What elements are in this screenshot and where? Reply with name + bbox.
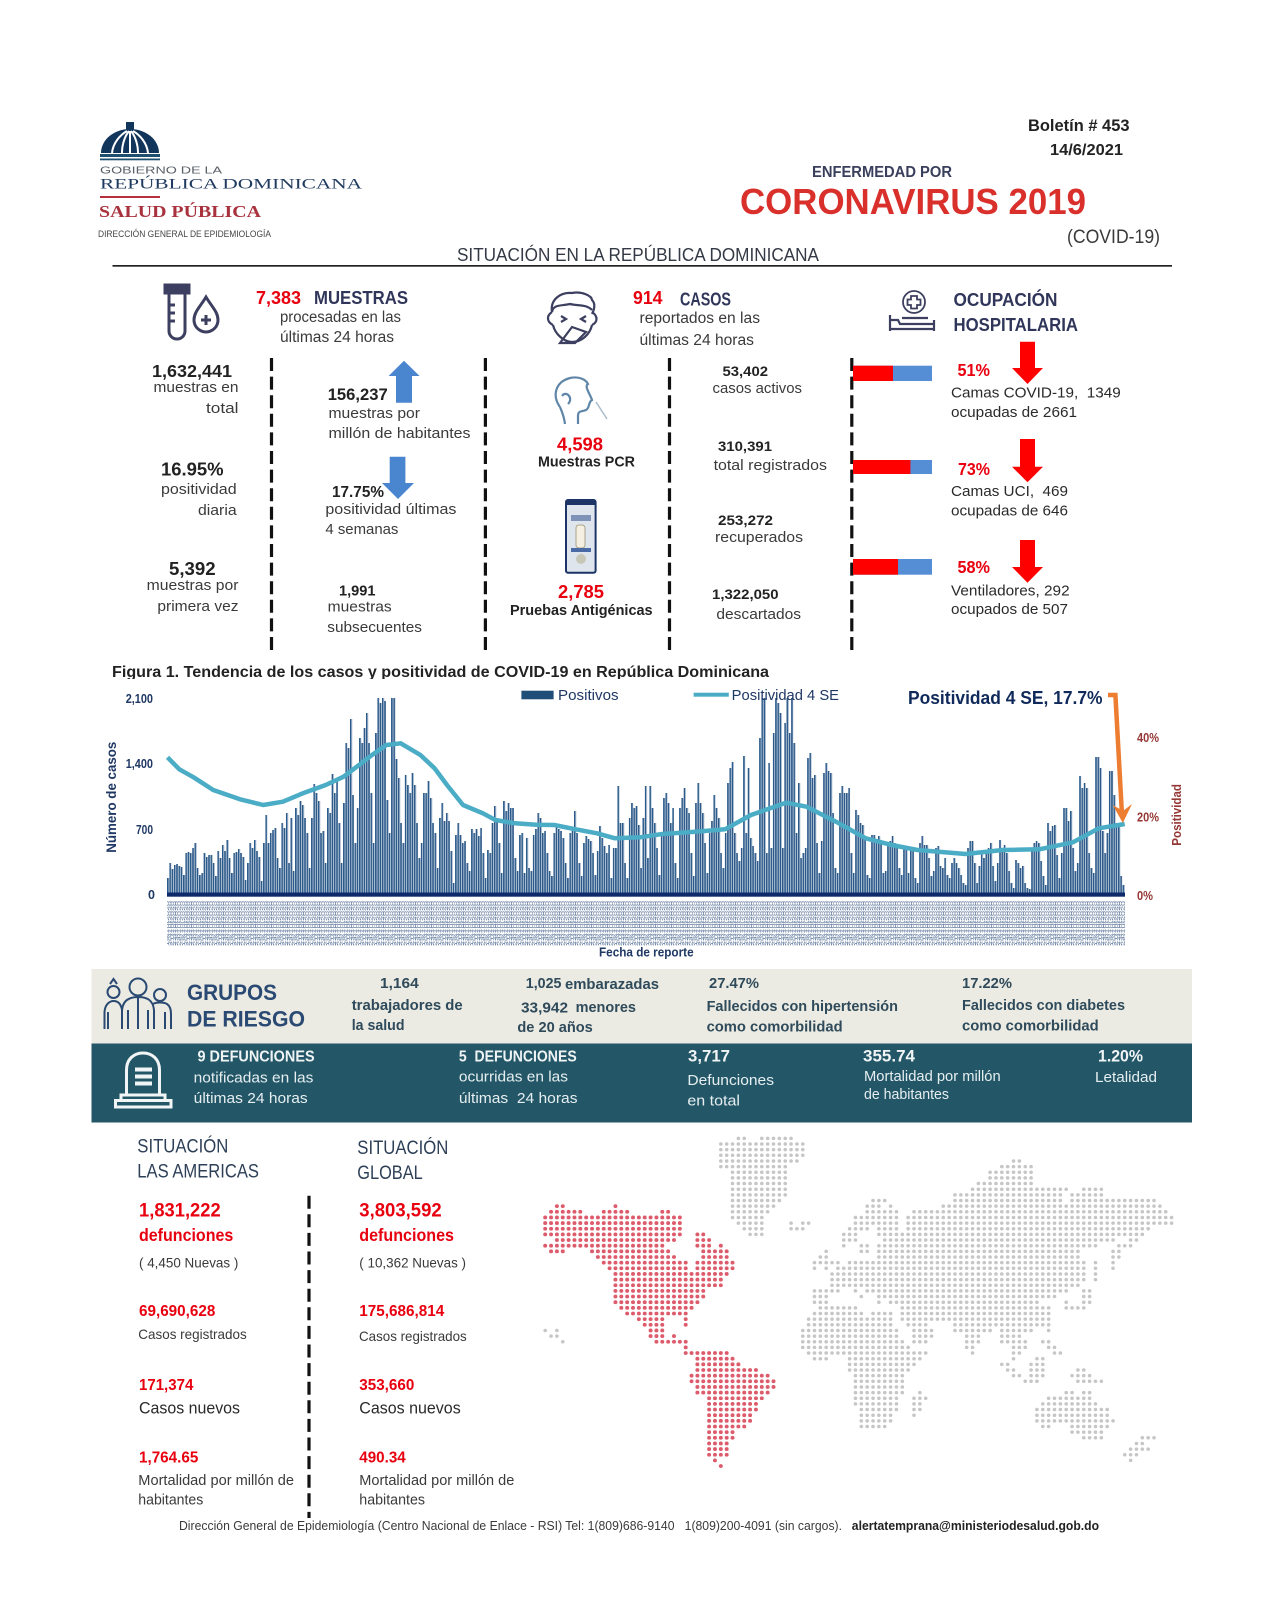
footer: contact line: Dirección General de Epidemiología (Centro Nacional de Enlace - RSI) Tel: 1(809)686-9140 1(809)200-4091 (sin cargos).	[179, 1518, 842, 1533]
panel: muestras: subsecuentes	[327, 619, 422, 636]
panel: grupos de riesgo: de 20 años	[517, 1019, 593, 1036]
panel: situación las Américas: Casos nuevos	[139, 1399, 240, 1417]
panel: situación global: 490.34	[359, 1450, 406, 1467]
panel: casos: Pruebas Antigénicas	[510, 602, 653, 619]
panel: casos: descartados	[716, 606, 801, 623]
y axis labels	[104, 692, 155, 902]
panel: casos: 1,322,050	[712, 586, 779, 602]
y axis labels: 0	[148, 888, 155, 902]
panel: situación las Américas: 1,764.65	[139, 1450, 199, 1467]
panel: muestras: muestras por	[147, 577, 238, 594]
panel: grupos de riesgo: 1,164	[380, 976, 419, 992]
panel: casos: 914	[633, 287, 663, 308]
panel: grupos de riesgo: menores	[576, 999, 636, 1016]
panel: casos: últimas 24 horas	[640, 332, 754, 349]
panel: ocupación hospitalaria	[853, 289, 1121, 618]
y axis labels: 1,400	[126, 757, 153, 771]
icon: antigen test cartridge	[566, 500, 596, 573]
secondary axis labels: 0%	[1137, 889, 1153, 903]
panel: muestras: MUESTRAS	[314, 288, 408, 308]
panel: defunciones: notificadas en las	[194, 1069, 313, 1086]
y axis labels: Número de casos	[104, 742, 119, 853]
panel: situación las Américas: defunciones	[139, 1225, 234, 1245]
title: ENFERMEDAD POR	[812, 164, 952, 181]
panel: situación las Américas: LAS AMERICAS	[137, 1161, 259, 1183]
subtitle: situación en la República Dominicana: SITUACIÓN EN LA REPÚBLICA DOMINICANA	[457, 244, 820, 265]
callout: positividad 4 SE 17.7%: Positividad 4 SE, 17.7%	[908, 687, 1102, 708]
figure heading: Figura 1. Tendencia de los casos y positividad de COVID-19 en República Dominicana	[112, 664, 769, 681]
panel: grupos de riesgo: DE RIESGO	[187, 1007, 305, 1032]
panel: ocupación hospitalaria: ocupadas de 646	[951, 503, 1068, 520]
x axis dates	[167, 900, 1125, 946]
panel: defunciones: 9 DEFUNCIONES	[198, 1049, 315, 1066]
panel: ocupación hospitalaria: Camas UCI, 469	[951, 483, 1068, 500]
panel: defunciones: Mortalidad por millón	[864, 1069, 1001, 1085]
panel: grupos de riesgo: Fallecidos con hipertensión	[707, 998, 898, 1015]
legend	[521, 688, 839, 704]
panel: muestras: procesadas en las	[280, 309, 401, 326]
panel: grupos de riesgo: embarazadas	[565, 976, 659, 993]
map: rest of the world in grey	[545, 1138, 1172, 1460]
panel: defunciones: 5 DEFUNCIONES	[459, 1049, 577, 1066]
panel: grupos de riesgo: como comorbilidad	[707, 1019, 843, 1036]
panel: grupos de riesgo: GRUPOS	[187, 980, 277, 1005]
logo: Gobierno de la República Dominicana, Salud Pública: SALUD PÚBLICA	[99, 202, 261, 221]
footer: contact line: alertatemprana@ministeriodesalud.gob.do	[852, 1518, 1099, 1533]
panel: grupos de riesgo: 17.22%	[962, 976, 1012, 992]
chart: positivos y positividad	[104, 687, 1184, 960]
panel: situación global: Casos nuevos	[359, 1399, 461, 1417]
legend: Positivos	[558, 688, 619, 704]
panel: situación las Américas: SITUACIÓN	[137, 1134, 228, 1157]
panel: situación global: defunciones	[359, 1225, 454, 1245]
axis baseline	[167, 892, 1125, 897]
logo: Gobierno de la República Dominicana, Salud Pública: GOBIERNO DE LA	[100, 166, 222, 176]
panel: ocupación hospitalaria: Ventiladores, 292	[951, 583, 1070, 600]
icon: red arrow 1	[1012, 342, 1043, 384]
panel: situación las Américas	[137, 1134, 294, 1508]
panel: muestras: últimas 24 horas	[280, 329, 394, 346]
logo: Gobierno de la República Dominicana, Salud Pública: DIRECCIÓN GENERAL DE EPIDEMIOLOGÍA	[98, 229, 272, 240]
panel: grupos de riesgo	[92, 969, 1192, 1044]
bars: casos positivos diarios	[167, 698, 1125, 893]
panel: situación global: GLOBAL	[357, 1162, 423, 1184]
panel: grupos de riesgo: como comorbilidad	[962, 1018, 1099, 1035]
bulletin number and date: Boletín # 453	[1028, 117, 1130, 135]
panel: situación global: 175,686,814	[359, 1303, 445, 1320]
bulletin number and date: 14/6/2021	[1050, 142, 1123, 159]
panel: muestras: positividad últimas	[325, 501, 456, 518]
icon: swab test	[556, 377, 607, 424]
bar: ventiladores 58%	[853, 559, 932, 575]
panel: defunciones: Defunciones	[687, 1072, 774, 1089]
panel: situación global: ( 10,362 Nuevas )	[359, 1254, 466, 1270]
panel: ocupación hospitalaria: HOSPITALARIA	[954, 315, 1078, 335]
icon: people	[104, 978, 171, 1029]
panel: defunciones: últimas 24 horas	[459, 1090, 578, 1107]
icon: blue up arrow	[389, 361, 420, 403]
secondary axis labels: 40%	[1137, 731, 1159, 745]
panel: situación las Américas: Casos registrados	[138, 1326, 247, 1342]
panel: defunciones: de habitantes	[864, 1087, 949, 1103]
y axis labels: 700	[136, 823, 153, 837]
panel: grupos de riesgo: la salud	[352, 1017, 404, 1034]
panel: situación global: Casos registrados	[359, 1328, 467, 1344]
panel: casos: CASOS	[680, 290, 731, 310]
panel: defunciones	[92, 1044, 1192, 1122]
panel: casos: casos activos	[712, 380, 802, 397]
panel: muestras: diaria	[198, 502, 237, 519]
bar: camas COVID-19 51%	[853, 366, 932, 381]
panel: casos: Muestras PCR	[538, 454, 635, 471]
panel: muestras: muestras en	[154, 379, 238, 396]
panel: situación global: SITUACIÓN	[357, 1136, 448, 1159]
legend: Positividad 4 SE	[732, 688, 839, 704]
panel: defunciones: 3,717	[688, 1047, 730, 1066]
x axis title: Fecha de reporte	[599, 946, 694, 960]
icon: test tube and drop	[165, 285, 218, 339]
panel: muestras: 4 semanas	[325, 521, 398, 538]
panel: situación global: Mortalidad por millón de	[359, 1472, 514, 1489]
secondary axis labels: Positividad	[1170, 784, 1184, 846]
panel: grupos de riesgo: trabajadores de	[352, 997, 463, 1014]
secondary axis labels: 20%	[1137, 811, 1159, 825]
panel: defunciones: Letalidad	[1095, 1069, 1157, 1086]
panel: situación global: habitantes	[359, 1491, 425, 1508]
panel: ocupación hospitalaria: ocupados de 507	[951, 601, 1068, 618]
panel: grupos de riesgo: 33,942	[521, 1001, 568, 1017]
panel: muestras	[147, 285, 470, 636]
arrow: orange callout arrow	[1108, 695, 1132, 823]
line: positividad 4 SE	[168, 743, 1125, 854]
panel: muestras: 7,383	[256, 287, 301, 308]
icon: hospital bed	[890, 291, 934, 331]
icon: tombstone	[116, 1053, 171, 1107]
panel: situación las Américas: ( 4,450 Nuevas )	[139, 1254, 238, 1270]
panel: situación global: 353,660	[359, 1377, 414, 1394]
panel: situación las Américas: Mortalidad por millón de	[138, 1472, 294, 1489]
logo: Gobierno de la República Dominicana, Salud Pública	[98, 122, 363, 240]
icon: red arrow 2	[1012, 439, 1043, 482]
panel: defunciones: ocurridas en las	[459, 1069, 568, 1086]
panel: casos	[510, 287, 827, 623]
panel: defunciones: en total	[687, 1093, 740, 1110]
panel: muestras: millón de habitantes	[328, 425, 470, 442]
logo: Gobierno de la República Dominicana, Salud Pública: REPÚBLICA DOMINICANA	[100, 176, 363, 192]
panel: defunciones: 355.74	[863, 1047, 916, 1066]
panel: muestras: 16.95%	[161, 460, 224, 480]
panel: situación global: 3,803,592	[359, 1200, 442, 1222]
panel: muestras: muestras por	[328, 405, 420, 422]
panel: casos: recuperados	[715, 529, 803, 546]
icon: blue down arrow	[382, 457, 414, 499]
panel: defunciones: 1.20%	[1098, 1047, 1143, 1066]
panel: muestras: positividad	[161, 481, 237, 498]
icon: face with mask	[548, 293, 596, 343]
dashed column dividers	[272, 358, 852, 655]
title: CORONAVIRUS 2019	[740, 181, 1086, 222]
panel: ocupación hospitalaria: ocupadas de 2661	[951, 404, 1077, 421]
panel: grupos de riesgo: 27.47%	[709, 976, 759, 992]
panel: situación global	[357, 1136, 514, 1508]
secondary axis labels	[1137, 731, 1184, 903]
panel: muestras: 1,991	[339, 583, 376, 600]
panel: defunciones: últimas 24 horas	[194, 1090, 308, 1107]
panel: casos: 2,785	[558, 581, 604, 602]
panel: casos: 310,391	[718, 438, 772, 454]
panel: muestras: 5,392	[169, 559, 216, 579]
map: Americas in red	[545, 1206, 774, 1466]
panel: situación las Américas: 171,374	[139, 1377, 194, 1394]
panel: muestras: primera vez	[157, 598, 238, 615]
panel: ocupación hospitalaria: Camas COVID-19, 1349	[951, 385, 1121, 402]
y axis labels: 2,100	[126, 692, 153, 706]
bar: camas UCI 73%	[853, 460, 932, 474]
title	[740, 164, 1160, 248]
panel: situación las Américas: 1,831,222	[139, 1200, 221, 1222]
dotted world map	[545, 1138, 1172, 1466]
panel: ocupación hospitalaria: 58%	[958, 557, 990, 577]
panel: casos: 4,598	[557, 434, 603, 455]
panel: muestras: total	[206, 400, 238, 417]
dashed divider between regions	[307, 1196, 311, 1518]
panel: ocupación hospitalaria: OCUPACIÓN	[954, 289, 1058, 310]
panel: casos: 253,272	[718, 512, 773, 528]
panel: muestras: muestras	[328, 599, 392, 616]
panel: grupos de riesgo: Fallecidos con diabetes	[962, 997, 1125, 1014]
panel: muestras: 156,237	[328, 385, 388, 404]
panel: muestras: 17.75%	[332, 484, 384, 501]
bulletin number and date	[1028, 117, 1130, 159]
panel: casos: total registrados	[714, 457, 827, 474]
panel: grupos de riesgo: 1,025	[526, 976, 561, 992]
title: (COVID-19)	[1067, 226, 1160, 248]
panel: situación las Américas: 69,690,628	[139, 1303, 216, 1320]
icon: dome	[100, 122, 160, 160]
panel: situación las Américas: habitantes	[138, 1491, 203, 1508]
panel: ocupación hospitalaria: 73%	[958, 459, 990, 479]
panel: ocupación hospitalaria: 51%	[958, 360, 990, 380]
icon: red arrow 3	[1012, 540, 1043, 583]
panel: muestras: 1,632,441	[152, 361, 232, 381]
panel: casos: 53,402	[722, 363, 768, 379]
panel: casos: reportados en las	[640, 310, 760, 327]
